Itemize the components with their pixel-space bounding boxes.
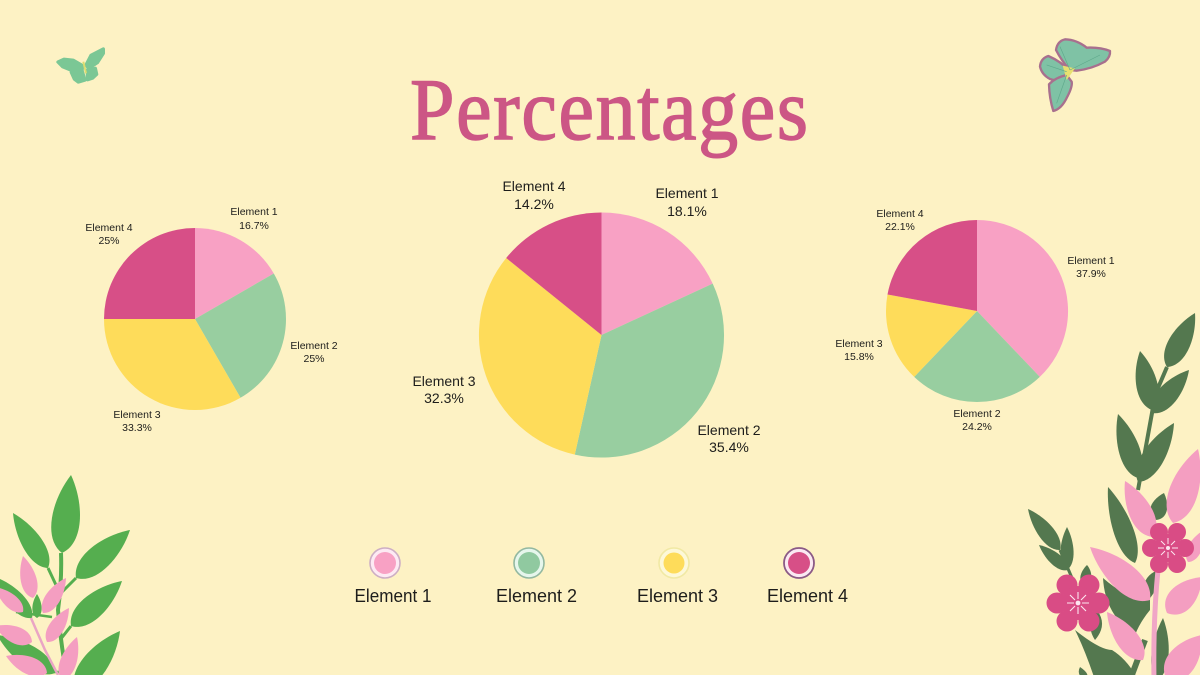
right label: element 4: 22.1% (885, 221, 915, 233)
left label: element 1: 16.7% (239, 220, 269, 232)
legend item: element 3 (637, 548, 718, 606)
left label: element 1 (230, 206, 278, 232)
right label: element 2: Element 2 (953, 408, 1001, 420)
left label: element 2: Element 2 (290, 340, 338, 352)
right label: element 3 (835, 338, 883, 363)
right slice: element 3 (886, 294, 977, 377)
left label: element 4: Element 4 (85, 222, 133, 234)
title: Percentages (410, 62, 808, 159)
center slice: element 2 (575, 284, 724, 458)
icon: small green butterfly (58, 49, 103, 82)
center label: element 1: Element 1 (655, 185, 719, 201)
pie chart: left (85, 206, 338, 434)
center label: element 4 (502, 178, 566, 212)
legend item: element 2 (496, 548, 577, 606)
bottom left pink leaves (0, 554, 85, 675)
left label: element 2: 25% (303, 353, 325, 365)
left label: element 4 (85, 222, 133, 247)
left label: element 3: Element 3 (113, 409, 161, 421)
right label: element 3: 15.8% (844, 351, 874, 363)
bottom right dark green leaves (1022, 308, 1200, 675)
legend item: element 4 (767, 548, 848, 606)
center label: element 1 (655, 185, 719, 219)
right label: element 2: 24.2% (962, 421, 992, 433)
right label: element 2 (953, 408, 1001, 433)
center label: element 3: Element 3 (412, 373, 476, 389)
legend item: element 1 (354, 548, 432, 606)
center label: element 1: 18.1% (667, 203, 707, 219)
center slice: element 4 (506, 212, 602, 335)
center label: element 2: 35.4% (709, 439, 749, 455)
center slice: element 1 (602, 212, 713, 335)
legend item: element 1: Element 1 (354, 586, 432, 606)
plant: bottom right (1022, 308, 1200, 675)
right label: element 3: Element 3 (835, 338, 883, 350)
center label: element 4: 14.2% (514, 196, 554, 212)
center label: element 3 (412, 373, 476, 406)
legend (354, 548, 848, 606)
icon: lower flower (1046, 574, 1110, 632)
center slice: element 3 (479, 258, 602, 455)
left label: element 1: Element 1 (230, 206, 278, 218)
icon: upper flower (1142, 523, 1194, 573)
plant: bottom left (0, 473, 138, 675)
right label: element 1: 37.9% (1076, 268, 1106, 280)
right label: element 1 (1067, 255, 1115, 280)
right label: element 4 (876, 208, 924, 233)
right slice: element 1 (977, 220, 1068, 377)
legend item: element 2: Element 2 (496, 586, 577, 606)
center label: element 3: 32.3% (424, 390, 464, 406)
right slice: element 2 (914, 311, 1040, 402)
center label: element 2 (697, 422, 761, 455)
bottom right pink leaves (1081, 444, 1200, 675)
left slice: element 2 (195, 274, 286, 398)
pie chart: right (835, 208, 1115, 433)
center label: element 2: Element 2 (697, 422, 761, 438)
left label: element 4: 25% (98, 235, 120, 247)
right slice: element 4 (888, 220, 977, 311)
left label: element 2 (290, 340, 338, 365)
left label: element 3 (113, 409, 161, 434)
left slice: element 3 (104, 319, 240, 410)
left label: element 3: 33.3% (122, 422, 152, 434)
pie chart: center (412, 178, 761, 458)
bottom left green leaves (0, 473, 138, 675)
center label: element 4: Element 4 (502, 178, 566, 194)
icon: large teal and pink butterfly (1040, 39, 1110, 111)
left slice: element 1 (195, 228, 274, 319)
legend item: element 3: Element 3 (637, 586, 718, 606)
right label: element 4: Element 4 (876, 208, 924, 220)
left slice: element 4 (104, 228, 195, 319)
right label: element 1: Element 1 (1067, 255, 1115, 267)
legend item: element 4: Element 4 (767, 586, 848, 606)
